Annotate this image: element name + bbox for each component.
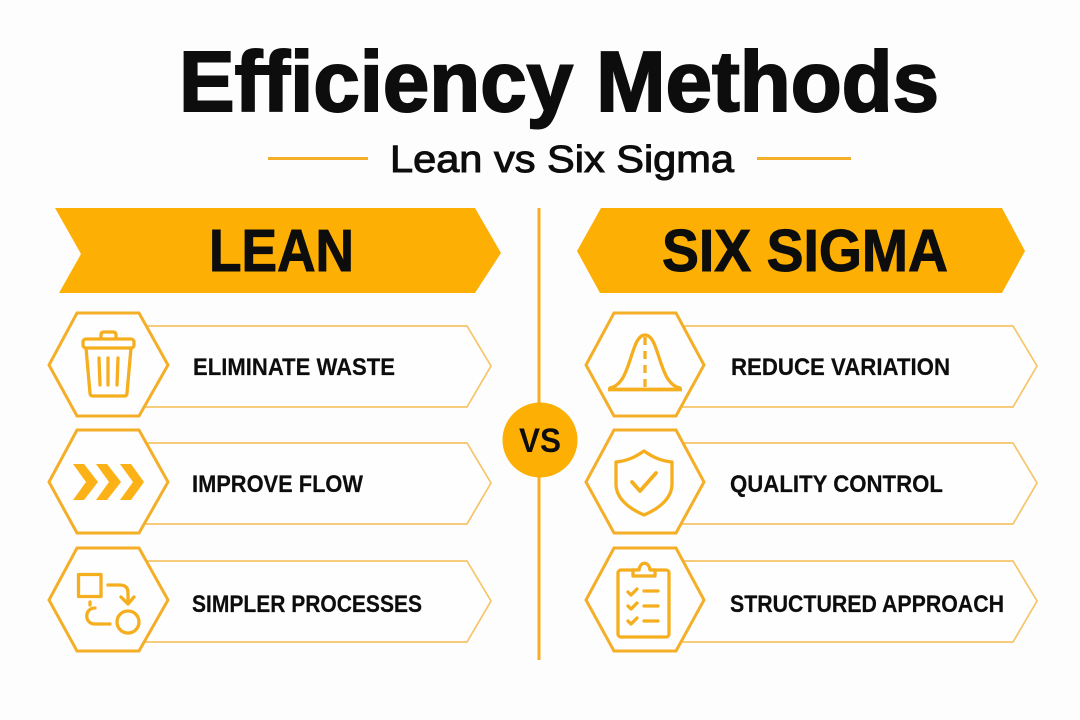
panel: six sigma header banner: SIX SIGMA [662, 218, 948, 284]
panel: lean header banner: LEAN [209, 218, 354, 284]
panel: lean header banner [55, 208, 501, 293]
icon: clipboard checklist [618, 563, 669, 637]
label: quality control: QUALITY CONTROL [730, 471, 943, 498]
panel: eliminate waste [49, 313, 491, 416]
VS badge: VS [519, 422, 561, 460]
panel: structured approach [586, 548, 1037, 651]
label: reduce variation: REDUCE VARIATION [731, 354, 950, 381]
subtitle: Lean vs Six Sigma [390, 139, 735, 181]
panel: six sigma header banner [577, 208, 1025, 293]
panel: simpler processes [49, 548, 491, 651]
label: improve flow: IMPROVE FLOW [192, 471, 363, 498]
icon: trash can [83, 332, 134, 396]
icon: shield check [616, 451, 672, 515]
icon: process flow [78, 574, 139, 633]
panel: reduce variation [586, 313, 1037, 416]
icon: bell curve [608, 335, 682, 390]
icon: chevrons [73, 464, 144, 500]
VS badge [502, 402, 578, 478]
title: Efficiency Methods [179, 35, 939, 130]
label: eliminate waste: ELIMINATE WASTE [193, 354, 395, 381]
label: simpler processes: SIMPLER PROCESSES [192, 591, 422, 618]
panel: improve flow [49, 430, 491, 533]
panel: quality control [586, 430, 1037, 533]
label: structured approach: STRUCTURED APPROACH [730, 591, 1004, 618]
center divider [538, 208, 540, 660]
